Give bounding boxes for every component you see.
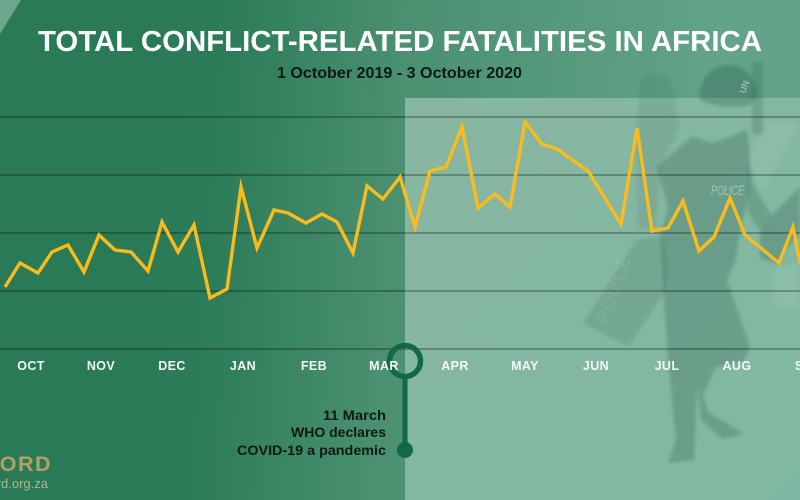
pandemic marker (390, 346, 420, 458)
month axis labels: FEB (301, 359, 327, 373)
month axis labels: JUN (583, 359, 609, 373)
photo: POLICE shield lettering: POLICE (592, 252, 636, 327)
month axis labels: JAN (230, 359, 256, 373)
photo: POLICE vest lettering: POLICE (711, 182, 744, 198)
marker ring (390, 346, 420, 376)
photo: pale rubble (745, 120, 800, 310)
month axis labels: NOV (87, 359, 115, 373)
photo: helmet lettering: UN (737, 79, 751, 95)
month axis labels (17, 359, 800, 373)
marker dot (397, 442, 413, 458)
photo: officer arm (760, 187, 800, 264)
month axis labels: APR (441, 359, 469, 373)
photo: officer torso and legs (657, 130, 750, 463)
corner highlight (0, 0, 21, 34)
month axis labels: DEC (158, 359, 186, 373)
annotation: WHO pandemic declaration (237, 408, 387, 458)
photo: upper arm (747, 130, 772, 235)
line chart: conflict fatalities (5, 122, 800, 298)
annotation: WHO pandemic declaration: 11 March (323, 408, 386, 423)
translucent post-pandemic panel (405, 98, 800, 500)
photo: post behind helmet (752, 62, 763, 134)
subtitle: 1 October 2019 - 3 October 2020 (277, 65, 522, 82)
photo: helmet (700, 65, 757, 107)
annotation: WHO pandemic declaration: WHO declares (291, 425, 386, 440)
month axis labels: JUL (655, 359, 679, 373)
month axis labels: AUG (723, 359, 751, 373)
marker stem (402, 379, 408, 450)
background photo: police officer silhouette (583, 62, 800, 463)
photo: riot shield (583, 236, 668, 347)
annotation: WHO pandemic declaration: COVID-19 a pandemic (237, 443, 387, 458)
title: TOTAL CONFLICT-RELATED FATALITIES IN AFRICA (38, 26, 762, 58)
month axis labels: OCT (17, 359, 45, 373)
month axis labels: MAR (369, 359, 399, 373)
photo: figure behind officer (636, 73, 680, 230)
chart gridlines (0, 117, 800, 349)
month axis labels: MAY (511, 359, 539, 373)
